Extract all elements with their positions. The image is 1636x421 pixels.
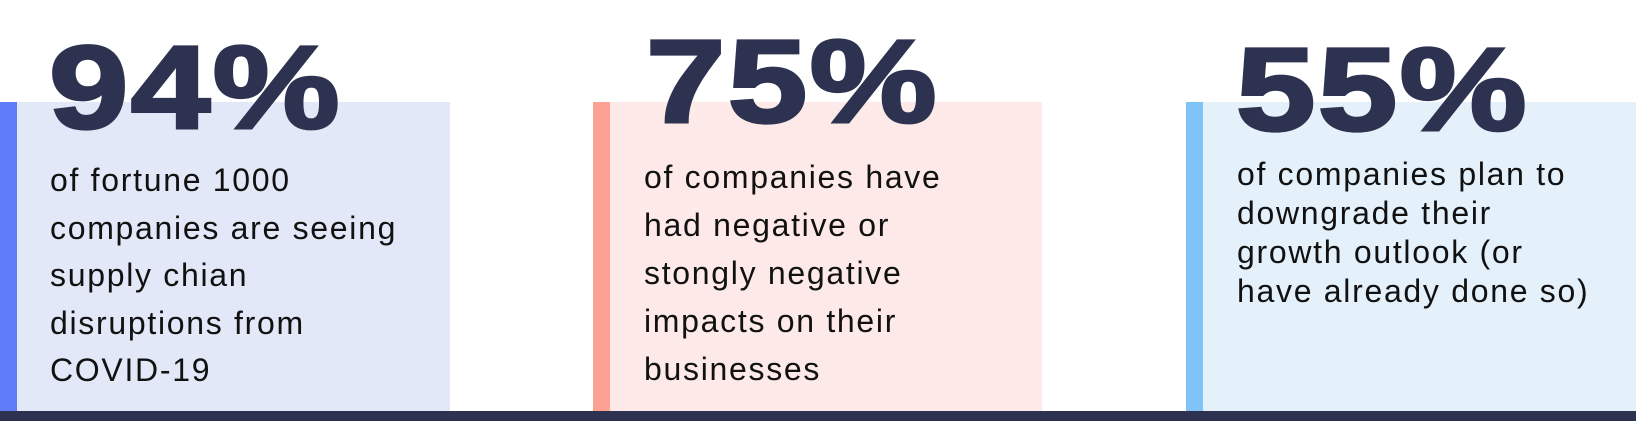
description 2: impacts on their bbox=[644, 303, 897, 339]
description 3: growth outlook (or bbox=[1237, 234, 1524, 270]
description 2: had negative or bbox=[644, 207, 890, 243]
panel: 55% bbox=[1186, 24, 1636, 411]
background box 1 bbox=[17, 102, 450, 411]
accent bar 3 bbox=[1186, 102, 1203, 411]
stat number 94%: 94% bbox=[49, 22, 342, 154]
description 2: of companies have bbox=[644, 159, 942, 195]
description 2: stongly negative bbox=[644, 255, 902, 291]
description 1: supply chian bbox=[50, 257, 248, 293]
description 2 bbox=[644, 159, 942, 387]
description 2: businesses bbox=[644, 351, 821, 387]
bottom dark band bbox=[0, 411, 1636, 421]
accent bar 1 bbox=[0, 102, 17, 411]
description 3 bbox=[1237, 156, 1589, 309]
stat number 75%: 75% bbox=[646, 16, 939, 148]
description 3: have already done so) bbox=[1237, 273, 1589, 309]
description 1: disruptions from bbox=[50, 304, 305, 340]
panel: 75% bbox=[593, 16, 1042, 411]
accent bar 2 bbox=[593, 102, 610, 411]
background box 3 bbox=[1203, 102, 1636, 411]
description 3: downgrade their bbox=[1237, 195, 1492, 231]
panel: 94% bbox=[0, 22, 450, 411]
description 1: of fortune 1000 bbox=[50, 162, 291, 198]
stat number 55%: 55% bbox=[1236, 24, 1529, 156]
background box 2 bbox=[610, 102, 1042, 411]
description 1 bbox=[50, 162, 397, 388]
description 3: of companies plan to bbox=[1237, 156, 1566, 192]
description 1: companies are seeing bbox=[50, 210, 397, 246]
description 1: COVID-19 bbox=[50, 352, 211, 388]
